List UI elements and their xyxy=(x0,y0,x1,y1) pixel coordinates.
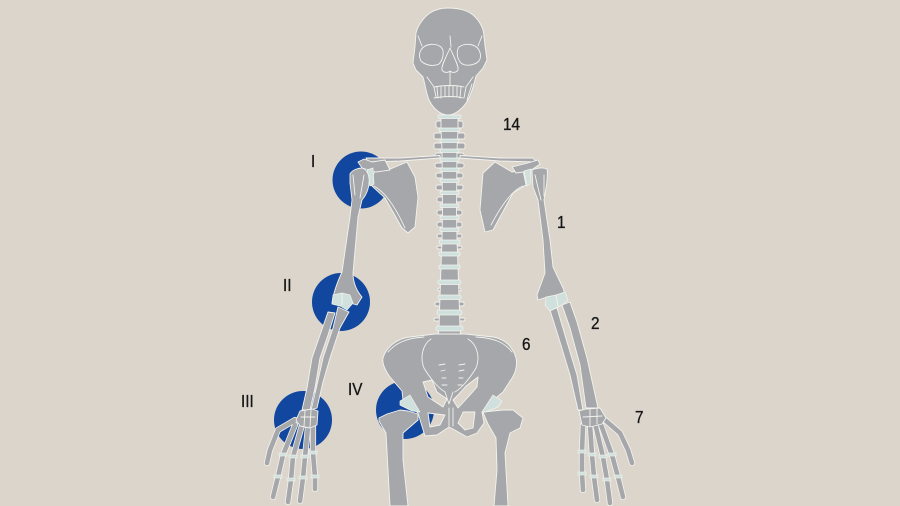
right humerus xyxy=(532,168,567,300)
label: 2: 2 xyxy=(591,313,600,333)
left ulna xyxy=(311,307,349,410)
left clavicle xyxy=(366,156,440,162)
right clavicle xyxy=(460,156,536,162)
right ulna xyxy=(550,308,583,410)
label: 7: 7 xyxy=(635,407,644,427)
marker III: wrist circle xyxy=(274,391,332,449)
marker IV: hip circle xyxy=(376,381,434,439)
label: 6: 6 xyxy=(522,334,531,354)
left acromion xyxy=(358,159,390,172)
femurs xyxy=(379,410,523,506)
left forearm xyxy=(302,293,353,410)
right hand xyxy=(578,408,632,503)
label: IV: IV xyxy=(348,379,363,399)
spine xyxy=(434,115,465,350)
right knuckle joints xyxy=(578,450,622,481)
vertebral column xyxy=(437,116,462,350)
pelvis xyxy=(383,334,517,437)
right femur xyxy=(483,410,523,506)
label: 1: 1 xyxy=(557,212,566,232)
transverse processes xyxy=(434,121,465,337)
left knuckle joints xyxy=(274,451,319,481)
right elbow cartilage xyxy=(545,292,568,311)
right acromion xyxy=(512,160,540,173)
label: 14: 14 xyxy=(503,114,520,134)
right shoulder cartilage xyxy=(524,169,531,186)
intervertebral discs xyxy=(435,115,464,346)
right shoulder girdle xyxy=(460,156,567,300)
marker I: shoulder circle xyxy=(332,152,390,208)
right radius xyxy=(562,302,598,408)
left elbow cartilage xyxy=(332,293,353,310)
label: III: III xyxy=(241,391,254,411)
left carpals xyxy=(296,409,318,428)
left femur xyxy=(379,410,418,506)
skull xyxy=(413,8,487,115)
label: II: II xyxy=(283,275,292,295)
left radius xyxy=(302,312,335,410)
right forearm xyxy=(545,292,598,410)
left hand xyxy=(267,409,319,502)
left hip cartilage xyxy=(400,395,420,412)
left humerus xyxy=(332,168,369,305)
left shoulder girdle xyxy=(332,156,440,305)
left scapula xyxy=(370,162,418,233)
left shoulder cartilage xyxy=(367,168,374,186)
label: I: I xyxy=(311,151,315,171)
right scapula xyxy=(480,162,526,232)
right carpals xyxy=(579,408,606,427)
marker II: elbow circle xyxy=(312,273,370,331)
right hip cartilage xyxy=(482,395,502,412)
